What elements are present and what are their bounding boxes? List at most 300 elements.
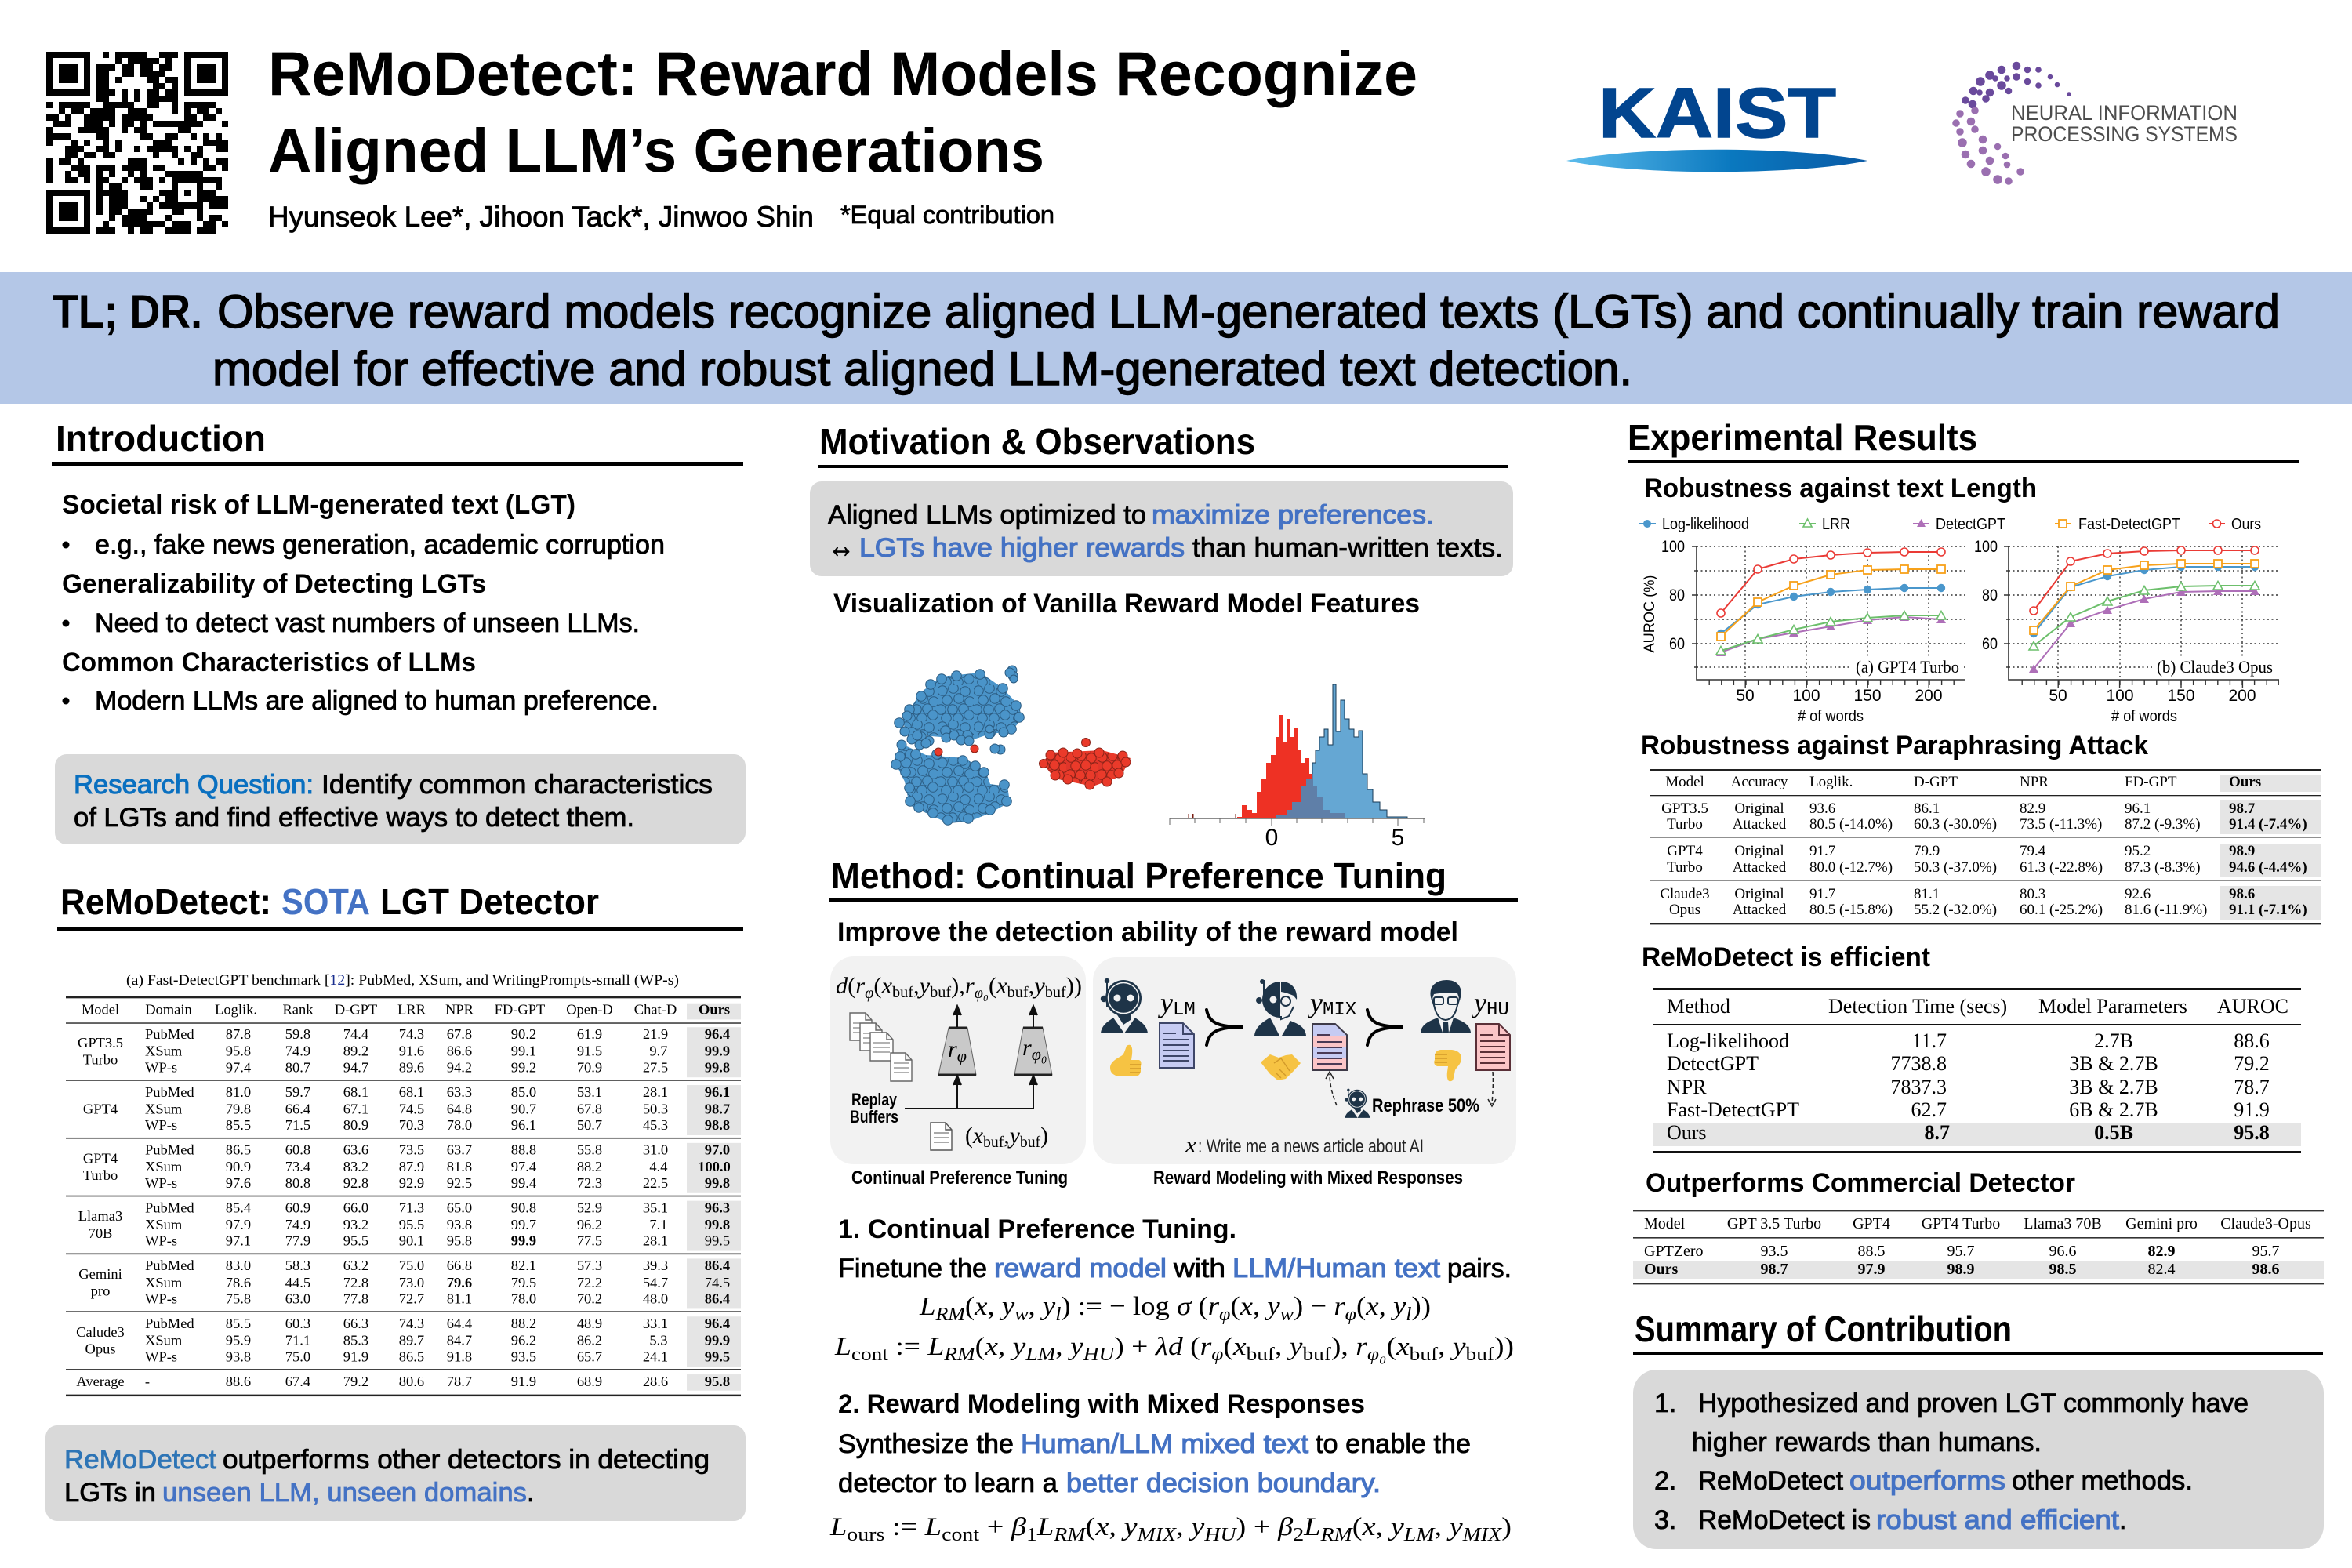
callout: summary list: robust and efficient [1876,1505,2120,1535]
table: paraphrasing attack: GPT3.5 [1661,800,1708,817]
label: replay buffers: Buffers [850,1107,898,1127]
chart: GPT4 Turbo line chart: 80 [1669,586,1685,604]
table: benchmark: 28.1 [643,1084,668,1100]
table: benchmark: 70.2 [577,1291,602,1306]
formula: L cont: := [888,1333,927,1361]
table: benchmark: 63.6 [343,1142,368,1158]
table: benchmark: PubMed [145,1316,194,1331]
formula: buffer sample: buf [983,1134,1004,1151]
table: benchmark: 87.9 [399,1159,424,1174]
table: commercial detector: 93.5 [1761,1243,1788,1260]
table: commercial detector: GPTZero [1644,1243,1704,1260]
table: benchmark: 74.3 [399,1316,424,1331]
formula: L ours: ) [1501,1513,1512,1541]
text block: introduction bullets: Common Characteristics of LLMs [62,648,476,677]
callout: summary list: Hypothesized and proven LGT commonly have [1698,1388,2249,1418]
table: benchmark: 96.4 [705,1026,730,1042]
table: benchmark: 91.5 [577,1044,602,1059]
formula: distance: y [1032,973,1045,999]
table: benchmark: 5.3 [649,1333,668,1348]
table: paraphrasing attack: 91.4 (-7.4%) [2229,816,2307,833]
table: benchmark: 68.1 [399,1084,424,1100]
authors [268,201,1054,233]
table: benchmark: 99.8 [705,1217,730,1232]
callout: aligned LLMs: Aligned LLMs optimized to [828,500,1146,530]
table: benchmark: 63.2 [343,1258,368,1273]
table: benchmark: 65.7 [577,1348,602,1364]
table: benchmark: Opus [85,1341,116,1356]
callout: summary list: 1. [1654,1388,1676,1418]
diagram: reward model trapezoids: r [948,1036,957,1062]
table: benchmark: PubMed [145,1142,194,1158]
table: paraphrasing attack: 80.0 (-12.7%) [1809,859,1893,876]
formula: L cont: L [927,1333,944,1361]
table: paraphrasing attack: 96.1 [2125,800,2151,817]
table: benchmark: 96.3 [705,1200,730,1215]
table: benchmark: 68.9 [577,1374,602,1389]
formula: L cont: ( [975,1333,985,1361]
table: benchmark: 70B [89,1225,112,1241]
table: commercial detector: GPT4 Turbo [1922,1215,2000,1232]
table: benchmark: 44.5 [285,1275,310,1290]
formula: L ours: cont [942,1525,980,1545]
callout: summary list: ReMoDetect is [1698,1505,1871,1535]
table: paraphrasing attack: Turbo [1667,816,1703,833]
table: benchmark: 89.2 [343,1044,368,1059]
legend: detectors: Ours [2231,516,2261,533]
formula: distance: φ [865,985,873,1002]
prompt: write me a news article [1185,1132,1424,1158]
table: benchmark: 97.1 [226,1233,251,1249]
table: benchmark: 80.9 [343,1117,368,1133]
heading: motivation: Motivation & Observations [819,421,1255,462]
logo: NeurIPS: PROCESSING SYSTEMS [2011,122,2238,146]
table: benchmark: 90.7 [511,1102,536,1116]
table: benchmark: NPR [445,1002,474,1017]
table: benchmark: 63.0 [285,1291,310,1306]
icon: handshake [1261,1054,1301,1080]
table: benchmark: 86.5 [226,1142,251,1158]
formula: L RM: x, y [1366,1292,1405,1321]
formula: distance: ), [951,973,965,999]
table: benchmark: - [145,1374,150,1389]
table: benchmark: 78.0 [511,1291,536,1306]
formula: distance: buf [1045,984,1066,1001]
table: paraphrasing attack: Attacked [1733,902,1787,918]
table: commercial detector: Ours [1644,1261,1679,1278]
table: benchmark: 99.8 [705,1059,730,1075]
logo: NeurIPS: NEURAL INFORMATION [2011,101,2238,125]
table: benchmark: 88.6 [226,1374,251,1389]
table: benchmark: 21.9 [643,1026,668,1042]
formula: L RM: ( [1356,1292,1366,1321]
table: benchmark: 79.2 [343,1374,368,1389]
heading: experimental results [1628,417,2299,463]
chart: Claude3 Opus line chart: 60 [1982,635,1998,653]
label: y HU: HU [1486,1000,1509,1021]
table: benchmark: 72.8 [343,1275,368,1290]
icon: LLM document [1160,1023,1194,1068]
text block: continual preference tuning [838,1214,1512,1283]
table: efficiency: 11.7 [1911,1029,1947,1052]
callout: research question: Identify common characteristics [321,770,713,800]
table: efficiency: 7738.8 [1891,1052,1947,1075]
formula: L RM: l [1406,1305,1412,1325]
chart: Claude3 Opus line chart: 80 [1982,586,1998,604]
table: benchmark: Llama3 [78,1208,122,1224]
formula: L cont: ( [1386,1333,1396,1361]
table: benchmark: WP-s [145,1233,177,1249]
formula: L cont: y [1287,1333,1303,1361]
formula: L ours: , [1434,1513,1450,1541]
formula: buffer sample: , [1004,1123,1010,1149]
table: benchmark: XSum [145,1044,182,1059]
callout: aligned LLMs: LGTs have higher rewards [859,533,1185,563]
chart: reward histogram: 5 [1392,825,1404,851]
formula: L cont: , [1275,1333,1290,1361]
table: benchmark: 61.9 [577,1026,602,1042]
table: benchmark: 91.9 [343,1348,368,1364]
table: benchmark: XSum [145,1159,182,1174]
TL;DR banner: model for effective and robust aligned LLM-generated text detection. [212,343,1632,395]
arrows: rephrase [1326,1072,1496,1106]
table: benchmark: 79.6 [447,1275,472,1290]
table: benchmark: 80.7 [285,1059,310,1075]
formula: L cont: φ₀ [1367,1345,1386,1365]
table: efficiency: Fast-DetectGPT [1667,1098,1799,1121]
table: benchmark: 39.3 [643,1258,668,1273]
table: efficiency: 3B & 2.7B [2069,1052,2158,1075]
table: benchmark: 68.1 [343,1084,368,1100]
table: paraphrasing attack: 87.2 (-9.3%) [2125,816,2201,833]
table: benchmark: 50.7 [577,1117,602,1133]
callout: summary list [1633,1370,2324,1549]
formula: L cont: )) [1494,1333,1514,1361]
table: benchmark: 89.6 [399,1059,424,1075]
table: commercial detector: 98.6 [2252,1261,2280,1278]
formula: L cont: buf [1410,1345,1438,1365]
table: benchmark: 83.0 [226,1258,251,1273]
table: paraphrasing attack: Original [1734,843,1784,859]
table: commercial detector: 95.7 [2252,1243,2280,1260]
table: paraphrasing attack: 94.6 (-4.4%) [2229,859,2307,876]
text block: reward modeling: Synthesize the [838,1429,1014,1459]
table: benchmark: 70.9 [577,1059,602,1075]
prompt: write me a news article: x [1185,1132,1197,1158]
table: paraphrasing attack: 86.1 [1914,800,1940,817]
title: Aligned LLM’s Generations [268,115,1044,185]
table: benchmark: 45.3 [643,1117,668,1133]
table: benchmark: 94.2 [447,1059,472,1075]
table: efficiency [1653,988,2301,1153]
table: benchmark: 91.9 [511,1374,536,1389]
table: paraphrasing attack: 80.3 [2020,886,2045,902]
table: benchmark: 31.0 [643,1142,668,1158]
logo: NeurIPS [1953,63,2238,184]
diagram: reward model trapezoids: φ [957,1046,967,1065]
table: benchmark: 94.7 [343,1059,368,1075]
formula: buffer sample: (x [965,1123,983,1149]
table: benchmark: 74.9 [285,1217,310,1232]
table: efficiency: Log-likelihood [1667,1029,1789,1052]
formula: distance: ( [989,973,996,999]
table: paraphrasing attack: 60.1 (-25.2%) [2020,902,2103,918]
table: benchmark: 84.7 [447,1333,472,1348]
table: benchmark: 83.2 [343,1159,368,1174]
table: benchmark: 33.1 [643,1316,668,1331]
table: benchmark: 24.1 [643,1348,668,1364]
table: paraphrasing attack: NPR [2020,774,2049,790]
label: rephrase 50%: Rephrase 50% [1372,1095,1479,1116]
icon: human document [1476,1024,1510,1070]
table: benchmark: 73.5 [399,1142,424,1158]
text block: introduction bullets [62,490,665,716]
table: benchmark: Open-D [566,1002,613,1017]
formula: L cont: x [1232,1333,1247,1361]
label: replay buffers [850,1090,898,1127]
chart: Claude3 Opus line chart: # of words [2111,708,2177,725]
table: paraphrasing attack: Turbo [1667,859,1703,876]
formula: L ours: ( [1352,1513,1363,1541]
formula: L cont: L [834,1333,851,1361]
table: efficiency: Method [1667,995,1730,1018]
formula: L RM: ) := − log [1061,1292,1177,1321]
formula: L RM: r [1334,1292,1345,1321]
table: paraphrasing attack: 91.1 (-7.1%) [2229,902,2307,918]
table: benchmark: 72.7 [399,1291,424,1306]
table: benchmark: 66.8 [447,1258,472,1273]
table: benchmark: 80.6 [399,1374,424,1389]
table: benchmark: 98.8 [705,1117,730,1133]
table: benchmark: 59.8 [285,1026,310,1042]
table: paraphrasing attack: 80.5 (-14.0%) [1809,816,1893,833]
table: benchmark: 48.9 [577,1316,602,1331]
table: benchmark: 99.9 [511,1233,536,1249]
table: benchmark: 77.8 [343,1291,368,1306]
table: commercial detector [1633,1210,2324,1284]
table: efficiency: Model Parameters [2038,995,2187,1018]
table: benchmark: 96.1 [511,1117,536,1133]
formula: L cont: cont [851,1345,888,1365]
formula: distance: φ₀ [975,985,989,1002]
icon: half robot half human [1254,979,1306,1036]
chart: GPT4 Turbo line chart: 100 [1792,687,1820,705]
table: benchmark: 85.5 [226,1316,251,1331]
authors: *Equal contribution [840,201,1054,229]
table: benchmark: 99.5 [705,1348,730,1364]
formula: L RM: x, y [1240,1292,1279,1321]
formula: L RM: , [1029,1292,1043,1321]
table: benchmark: Turbo [83,1052,118,1067]
table: benchmark: Model [82,1002,119,1017]
table: commercial detector: Llama3 70B [2024,1215,2102,1232]
chart: Claude3 Opus line chart: 150 [2167,687,2195,705]
table: efficiency: 95.8 [2234,1121,2270,1144]
table: benchmark: 86.4 [705,1291,730,1306]
icon: buffer sample document [931,1123,952,1150]
formula: L ours: β [1011,1513,1027,1541]
table: commercial detector: 88.5 [1858,1243,1885,1260]
table: benchmark: 92.8 [343,1175,368,1191]
formula: L cont: r [1356,1333,1367,1361]
formula: L RM: φ [1345,1305,1356,1325]
table: efficiency: 2.7B [2094,1029,2133,1052]
formula: L ours: RM [1053,1525,1087,1545]
table: benchmark: 78.6 [226,1275,251,1290]
table: benchmark: 48.0 [643,1291,668,1306]
text block: reward modeling: 2. Reward Modeling with Mixed Responses [838,1389,1365,1419]
table: benchmark: 89.7 [399,1333,424,1348]
label: replay buffers: Replay [851,1090,898,1109]
panel: remodetect detector [45,881,746,1521]
heading: summary: Summary of Contribution [1635,1308,2012,1349]
table: benchmark: 72.2 [577,1275,602,1290]
chart: Claude3 Opus line chart: 100 [2106,687,2134,705]
table: benchmark: 98.7 [705,1102,730,1116]
formula: distance: )) [1066,973,1082,999]
callout: outperforms [45,1425,746,1521]
table: benchmark: Calude3 [76,1324,125,1340]
diagram: reward model trapezoids: r [1022,1035,1032,1061]
table: commercial detector: 98.7 [1761,1261,1788,1278]
table: benchmark: 96.2 [577,1217,602,1232]
icon: mixed document [1312,1024,1347,1070]
table: benchmark: 90.2 [511,1026,536,1042]
table: benchmark: Turbo [83,1167,118,1183]
table: benchmark: 66.0 [343,1200,368,1215]
table: benchmark: 75.8 [226,1291,251,1306]
formula: distance: y [917,973,931,999]
table: benchmark: 96.1 [705,1084,730,1100]
table: paraphrasing attack: Original [1734,800,1784,817]
icon: robot LLM [1101,978,1148,1033]
subheading: commercial: Outperforms Commercial Detector [1646,1168,2075,1198]
formula: distance: x [996,973,1007,999]
formula: distance: buf [930,984,951,1001]
formula: L RM: σ (r [1177,1292,1218,1321]
chart: GPT4 Turbo line chart: (a) GPT4 Turbo [1856,657,1959,677]
table: benchmark: 74.4 [343,1026,368,1042]
callout: outperforms: LGTs in [64,1478,156,1508]
table: commercial detector: Claude3-Opus [2220,1215,2311,1232]
table: benchmark: 70.3 [399,1117,424,1133]
formula: L ours: MIX [1136,1525,1178,1545]
panel: method [829,855,1518,1545]
table: benchmark: WP-s [145,1117,177,1133]
table: benchmark: 77.9 [285,1233,310,1249]
table: benchmark: 74.5 [705,1275,730,1290]
table: benchmark: 28.1 [643,1233,668,1249]
table: benchmark: 67.8 [447,1026,472,1042]
chart: GPT4 Turbo line chart: 200 [1915,687,1943,705]
diagram: reward model trapezoids: φ₀ [1032,1044,1047,1064]
formula: L cont: buf [1303,1345,1331,1365]
text block: continual preference tuning: Finetune the [838,1254,987,1283]
text block: reward modeling [838,1389,1471,1498]
callout: outperforms: ReMoDetect [64,1445,217,1475]
formula: L ours: x, y [1095,1513,1135,1541]
table: commercial detector: GPT4 [1853,1215,1890,1232]
table: benchmark: 99.9 [705,1044,730,1059]
chart: GPT4 Turbo line chart: 150 [1853,687,1882,705]
table: benchmark: 95.8 [705,1374,730,1389]
table: commercial detector: 98.9 [1947,1261,1974,1278]
formula: L RM: RM [935,1305,967,1325]
table: benchmark: 88.8 [511,1142,536,1158]
table: benchmark: 66.3 [343,1316,368,1331]
table: benchmark: 86.2 [577,1333,602,1348]
table: benchmark: GPT4 [83,1151,118,1166]
symbol: succeeds [1207,1010,1243,1045]
heading: method: Method: Continual Preference Tuning [831,855,1446,896]
panel: introduction [52,418,746,844]
table: efficiency: Ours [1667,1121,1707,1144]
table: efficiency: 8.7 [1924,1121,1950,1144]
table: paraphrasing attack: 87.3 (-8.3%) [2125,859,2201,876]
legend: detectors [1639,516,2261,533]
table: benchmark: 67.8 [577,1102,602,1116]
table: benchmark: 74.3 [399,1026,424,1042]
formula: L ours: := [884,1513,925,1541]
formula: distance: r [965,973,975,999]
table: benchmark: 27.5 [643,1059,668,1075]
table: paraphrasing attack: Ours [2229,774,2261,790]
title [268,38,1417,185]
heading: introduction: Introduction [56,418,266,459]
text block: continual preference tuning: with [1173,1254,1225,1283]
table: benchmark: 86.6 [447,1044,472,1059]
table: paraphrasing attack: 50.3 (-37.0%) [1914,859,1997,876]
label: y MIX: MIX [1323,1000,1356,1021]
chart: GPT4 Turbo line chart: # of words [1798,708,1864,725]
table: benchmark: WP-s [145,1291,177,1306]
table: paraphrasing attack: 82.9 [2020,800,2045,817]
table: paraphrasing attack: 81.6 (-11.9%) [2125,902,2207,918]
table: benchmark: 100.0 [698,1159,731,1174]
table: commercial detector: Gemini pro [2125,1215,2198,1232]
table: benchmark: 93.5 [511,1348,536,1364]
label: y LM: y [1160,987,1173,1018]
chart: Claude3 Opus line chart [1974,538,2279,725]
icon: thumbs up [1110,1045,1142,1076]
table: benchmark: 9.7 [649,1044,668,1059]
table: efficiency: AUROC [2217,995,2288,1018]
heading: experimental results: Experimental Results [1628,417,1977,458]
table: benchmark: WP-s [145,1348,177,1364]
table: benchmark: 63.7 [447,1142,472,1158]
table: benchmark: 99.7 [511,1217,536,1232]
formula: distance: , [913,973,920,999]
table: benchmark: 90.8 [511,1200,536,1215]
table: paraphrasing attack: Attacked [1733,859,1787,876]
formula: L RM: φ [1219,1305,1230,1325]
table: benchmark: 79.5 [511,1275,536,1290]
table: paraphrasing attack: 61.3 (-22.8%) [2020,859,2103,876]
icon: human [1421,981,1471,1033]
heading: summary [1633,1308,2323,1355]
table: benchmark: 64.8 [447,1102,472,1116]
table: paraphrasing attack: D-GPT [1914,774,1958,790]
table: paraphrasing attack: 73.5 (-11.3%) [2020,816,2102,833]
table: paraphrasing attack: 60.3 (-30.0%) [1914,816,1997,833]
callout: research question [55,754,746,844]
table: benchmark: 57.3 [577,1258,602,1273]
table: benchmark: GPT4 [83,1102,118,1116]
heading: remodetect: SOTA [281,881,370,922]
legend: detectors: DetectGPT [1936,516,2005,533]
formula: L cont: , [1438,1333,1453,1361]
table: benchmark: 96.4 [705,1316,730,1331]
